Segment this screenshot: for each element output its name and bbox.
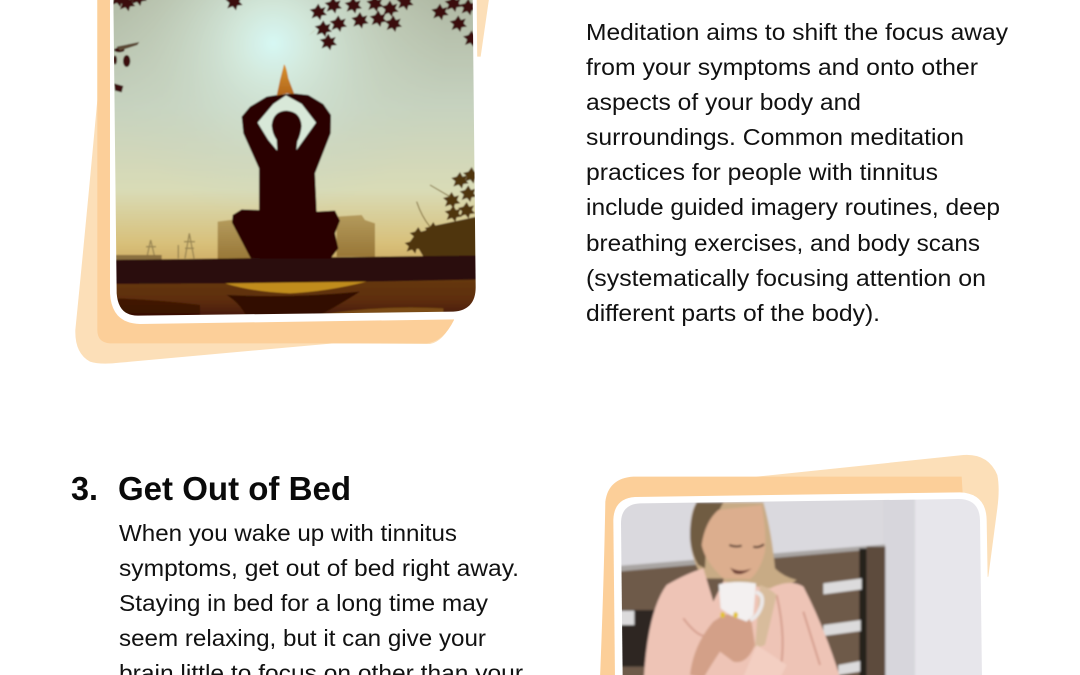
text block: meditation description: (systematically focusing attention on [586, 265, 986, 291]
photo: woman drinking coffee [621, 499, 982, 675]
face [702, 505, 765, 579]
heading: step 3: 3. [71, 470, 98, 507]
backing shape: light orange [75, 0, 489, 364]
backing shape: darker orange band [600, 477, 963, 675]
long hair over shirt [755, 585, 777, 648]
sleeve cuff [745, 645, 785, 675]
photo: meditating silhouette at sunset [100, 0, 490, 323]
photo card: meditation [75, 0, 490, 364]
right wall [883, 488, 917, 675]
headboard slots [823, 578, 862, 675]
backing shape: light orange [757, 455, 999, 578]
arm hole [258, 95, 316, 152]
photo card: woman with coffee [600, 455, 999, 675]
text block: meditation description: practices for people with tinnitus [586, 159, 938, 185]
nails [720, 612, 738, 618]
raised hands [277, 64, 294, 96]
hair [690, 502, 797, 590]
silhouette [232, 64, 340, 258]
text block: meditation description: Meditation aims to shift the focus away [586, 19, 1008, 45]
heading: step 3: Get Out of Bed [118, 470, 351, 507]
text block: meditation description: surroundings. Common meditation [586, 124, 964, 150]
smile [730, 568, 752, 574]
buildings [218, 215, 375, 260]
text block: meditation description: breathing exercises, and body scans [586, 230, 980, 256]
text block: meditation description [586, 19, 1008, 326]
text block: get out of bed description: Staying in bed for a long time may [119, 590, 488, 616]
gold reflection [225, 282, 367, 293]
text block: meditation description: different parts of the body). [586, 300, 880, 326]
headboard [622, 549, 867, 675]
text block: meditation description: from your symptoms and onto other [586, 54, 978, 80]
text block: get out of bed description: seem relaxing, but it can give your [119, 625, 486, 651]
text block: get out of bed description: symptoms, get out of bed right away. [119, 555, 519, 581]
headboard post [859, 548, 867, 675]
white photo frame [110, 0, 479, 324]
ledge [116, 255, 476, 286]
pylons [146, 233, 195, 258]
text block: meditation description: include guided imagery routines, deep [586, 194, 1000, 220]
mug [719, 582, 756, 622]
shirt [643, 568, 843, 675]
head [272, 111, 302, 155]
backing shape: darker orange band [97, 0, 473, 343]
text block: get out of bed description: When you wake up with tinnitus [119, 520, 457, 546]
text block: meditation description: aspects of your body and [586, 89, 861, 115]
distant horizon [115, 255, 162, 260]
eyes [729, 544, 764, 547]
text block: get out of bed description [119, 520, 523, 675]
bush bottom right [405, 167, 480, 257]
leaves top right [110, 0, 480, 92]
hands [690, 612, 755, 675]
white right gap [473, 57, 481, 320]
white photo frame [613, 492, 989, 675]
ground [116, 278, 476, 316]
